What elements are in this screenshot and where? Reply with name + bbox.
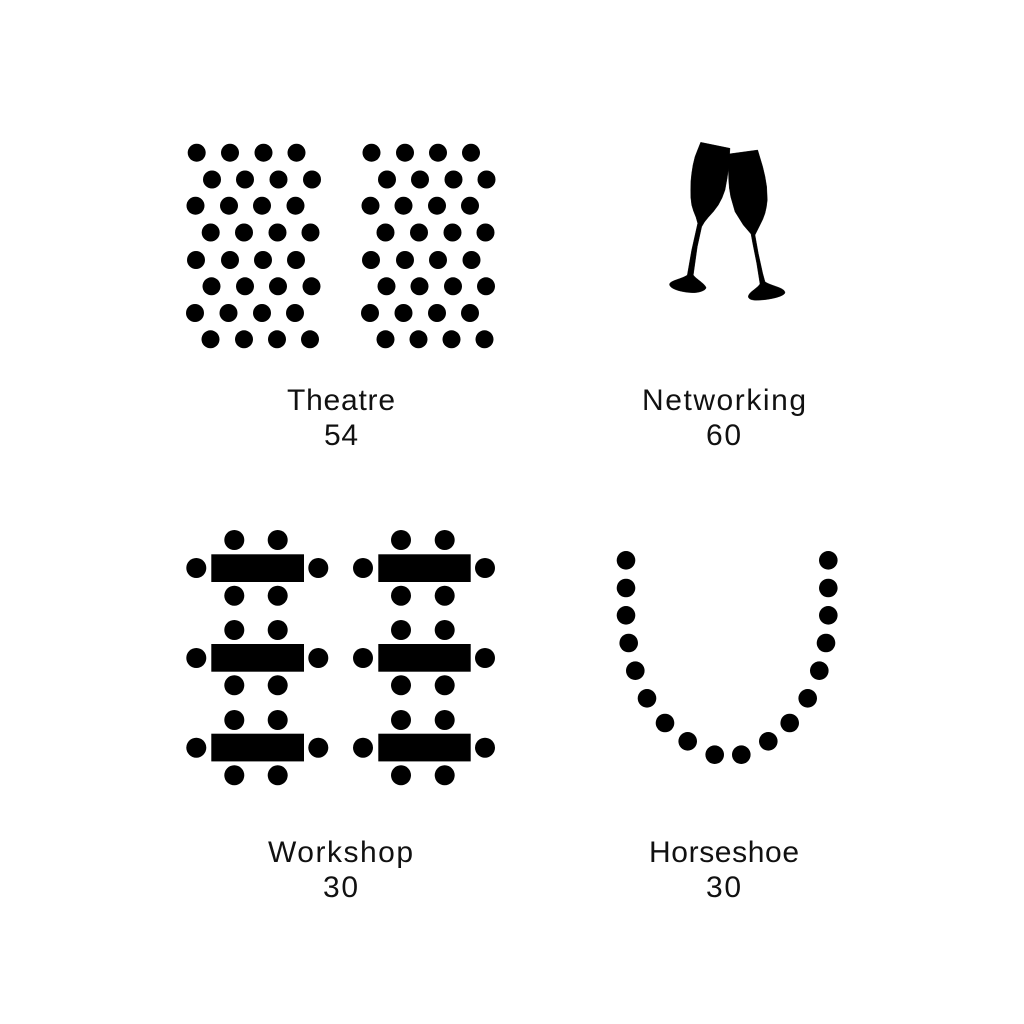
capacity: workshop 30: 30: [323, 871, 358, 904]
icon: workshop tables left column: [186, 530, 328, 785]
panel: horseshoe: [617, 551, 838, 904]
panel: networking: [642, 142, 806, 452]
capacity: horseshoe 30: 30: [706, 871, 741, 904]
label: theatre: Theatre: [287, 384, 395, 417]
label: networking: Networking: [642, 384, 806, 417]
icon: theatre seating right block: [361, 144, 496, 348]
icon: left champagne glass: [670, 142, 730, 293]
icon: theatre seating left block: [186, 144, 321, 348]
icon: workshop tables right column: [353, 530, 495, 785]
panel: theatre: [186, 144, 496, 452]
icon: right champagne glass: [728, 150, 785, 300]
capacity: networking 60: 60: [706, 419, 741, 452]
label: workshop: Workshop: [268, 836, 413, 869]
panel: workshop: [186, 530, 495, 904]
label: horseshoe: Horseshoe: [649, 836, 799, 869]
icon: horseshoe seating: [617, 551, 838, 764]
capacity: theatre 54: 54: [324, 419, 358, 452]
